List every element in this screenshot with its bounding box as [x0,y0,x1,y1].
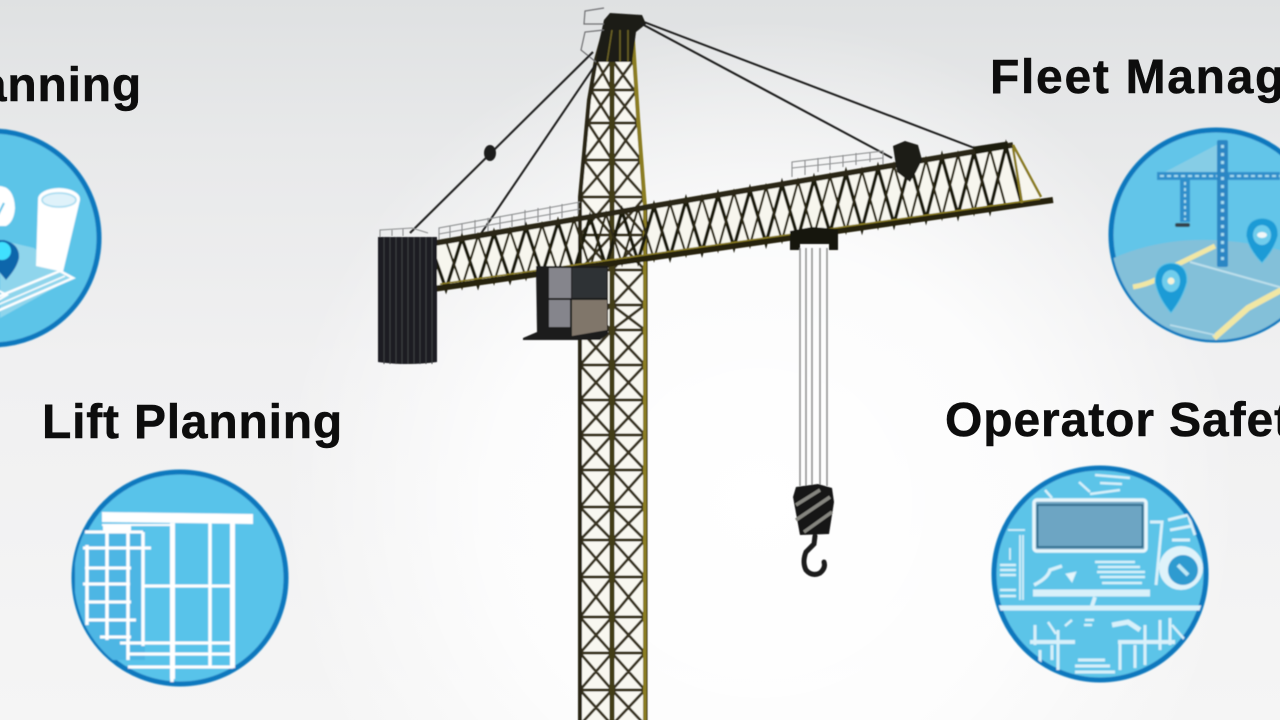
desk and controls [995,475,1205,672]
jib strut block [893,141,922,182]
heading: Lift Planning: Lift Planning [42,396,343,449]
hoist ropes [800,248,827,486]
trolley [790,227,838,250]
backstay cables [410,22,977,238]
icon circle: operator safety control cabin [994,468,1206,680]
jib truss [408,145,1053,292]
monitor [1034,500,1146,551]
icon circle: planning blueprint with pin [0,131,99,345]
icon circle: fleet management map with crane and pins [1105,130,1280,350]
hook block [793,484,834,535]
crane mast [580,20,647,720]
counterweight [378,237,437,364]
jib railings [380,151,883,240]
tower crane [378,8,1053,720]
truss interior tint [430,145,1041,288]
mast head [596,13,646,62]
gauge [1159,546,1203,590]
service platform railing [581,8,604,62]
operator cab [523,266,608,340]
crane hook [804,536,824,574]
mast interior tint [580,20,645,720]
icon circle: lift planning building grid [74,472,286,684]
